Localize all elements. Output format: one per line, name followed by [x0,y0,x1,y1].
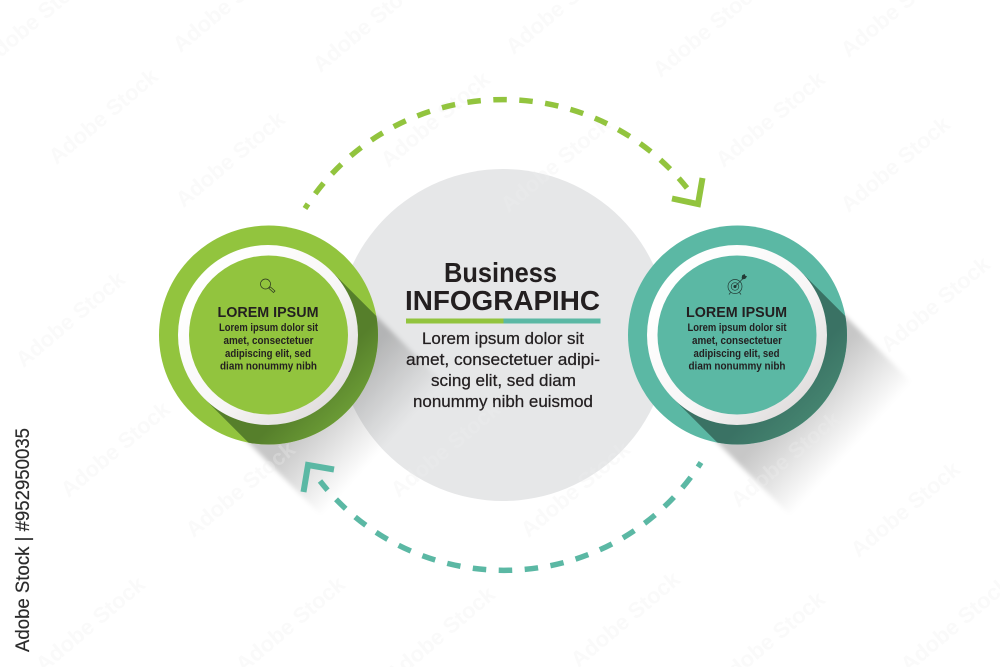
left inner disc [189,256,348,414]
watermark pattern: Adobe Stock [386,396,505,502]
left text block: Lorem ipsum dolor sit [219,322,318,334]
watermark pattern: Adobe Stock [44,63,163,169]
left heading: LOREM IPSUM [218,305,318,321]
watermark pattern: Adobe Stock [376,66,495,172]
icon: magnifying glass [260,279,275,292]
right text block: Lorem ipsum dolor sit [688,322,787,334]
watermark pattern: Adobe Stock [876,251,995,357]
right text block: diam nonummy nibh [688,360,786,372]
left outer disc [159,226,378,444]
icon: target with arrow [728,274,746,294]
right long shadow [673,271,981,579]
watermark pattern: Adobe Stock [846,456,965,562]
centre paragraph: amet, consectetuer adipi- [406,351,600,369]
left disc inner shadow [205,272,378,444]
left long shadow [204,271,512,579]
left text block: diam nonummy nibh [220,360,317,372]
left text block: amet, consectetuer [224,335,314,347]
panel: right teal circle [628,226,901,505]
right disc inner shadow [674,272,847,444]
watermark pattern: Adobe Stock [11,266,130,372]
watermark pattern: Adobe Stock [711,66,830,172]
title: INFOGRAPIHC [405,285,600,316]
title: Business [444,257,557,288]
stock id caption: Adobe Stock | #952950035 [13,428,34,652]
panel: centre text [405,257,600,411]
arrow: green dashed arc, left to right [305,100,702,208]
right text block: amet, consectetuer [692,335,783,347]
right text block [688,322,787,372]
watermark pattern: Adobe Stock [516,436,635,542]
right text block: adipiscing elit, sed [694,348,780,360]
central grey circle [337,169,669,501]
watermark pattern: Adobe Stock [496,111,615,217]
watermark pattern: Adobe Stock [171,106,290,212]
watermark pattern: Adobe Stock [726,406,845,512]
watermark pattern: Adobe Stock [181,436,300,542]
arrow: teal dashed arc, right to left [304,462,701,570]
left text block [219,322,318,372]
left white ring [178,245,358,425]
left text block: adipiscing elit, sed [225,348,311,360]
centre paragraph: Lorem ipsum dolor sit [422,330,584,348]
centre paragraph [406,330,600,411]
centre paragraph: scing elit, sed diam [431,372,576,390]
two-colour title bar [406,318,600,324]
watermark pattern: Adobe Stock [56,396,175,502]
title [405,257,600,316]
centre paragraph: nonummy nibh euismod [413,393,593,411]
right inner disc [658,256,816,414]
right heading: LOREM IPSUM [686,305,787,321]
panel: left green circle [159,226,431,505]
right outer disc [628,226,847,444]
right white ring [647,245,827,425]
watermark pattern: Adobe Stock [836,111,955,217]
